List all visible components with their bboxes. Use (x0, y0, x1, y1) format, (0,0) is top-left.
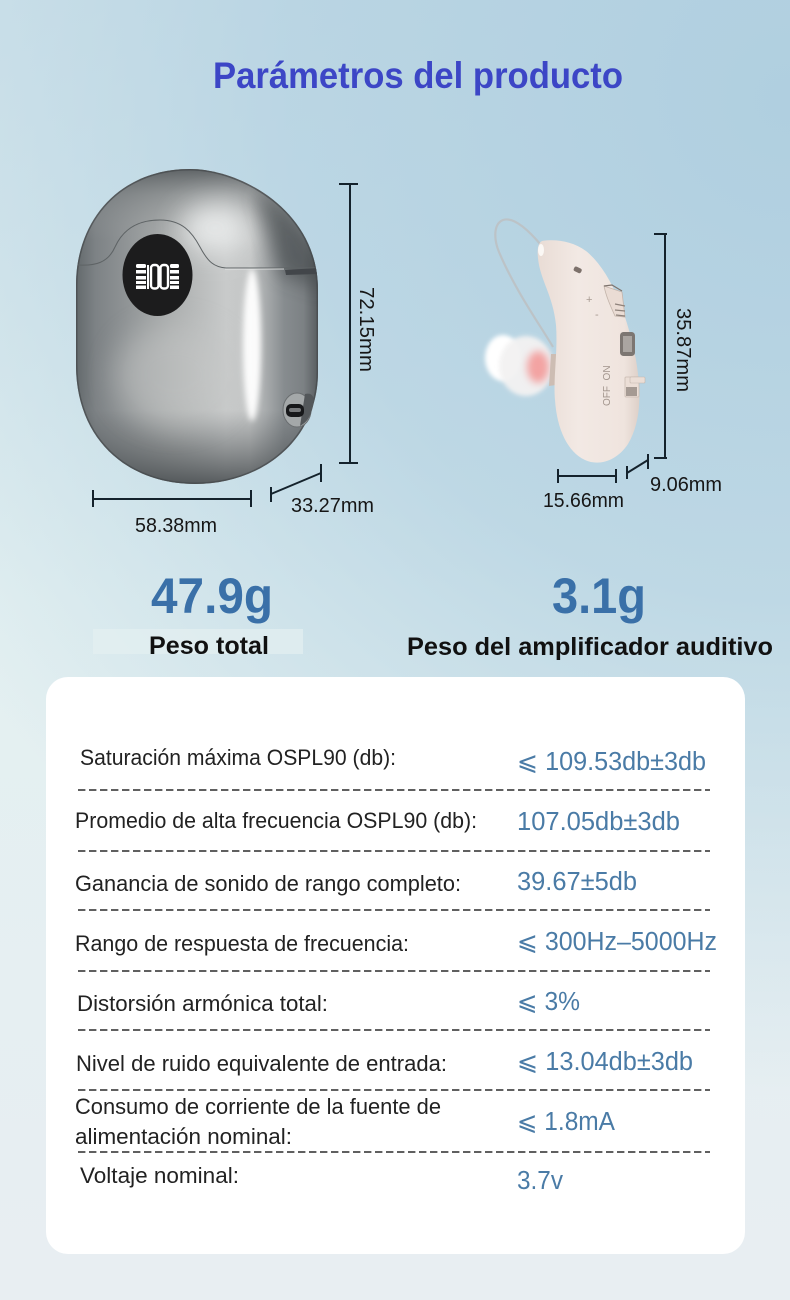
row: saturación: ⩽ 109.53db±3db (517, 748, 706, 776)
product: charging case (70, 165, 325, 488)
weight: amplifier (407, 568, 773, 661)
row: nivel: ⩽ 13.04db±3db (517, 1048, 693, 1076)
row: ganancia: Ganancia de sonido de rango completo: (75, 871, 461, 896)
row: voltaje (80, 1163, 563, 1195)
row: saturación (80, 745, 706, 776)
row: rango (75, 928, 717, 956)
row: ganancia: 39.67±5db (517, 868, 637, 896)
row: nivel: Nivel de ruido equivalente de entrada: (76, 1051, 447, 1076)
dimension: depth 9.06mm (627, 454, 722, 496)
row: voltaje: 3.7v (517, 1167, 563, 1195)
weight: total (93, 568, 303, 660)
power switch (602, 365, 645, 406)
dimension: depth 9.06mm: 9.06mm (650, 474, 722, 496)
row: promedio: Promedio de alta frecuencia OSPL90 (db): (75, 808, 477, 833)
dimension: width 58.38mm (93, 490, 251, 537)
top microphone (573, 266, 582, 274)
row: distorsión (77, 988, 580, 1016)
ear wire (495, 219, 553, 347)
icon: USB-C port (283, 393, 314, 427)
amplifier dimensions (543, 234, 722, 512)
row: rango: Rango de respuesta de frecuencia: (75, 931, 409, 956)
weight: amplifier: Peso del amplificador auditivo (407, 633, 773, 661)
ear dome (485, 335, 556, 396)
title: Parámetros del producto (213, 55, 623, 96)
row: consumo (75, 1094, 615, 1149)
dimension: depth 33.27mm (271, 464, 374, 517)
icon: case display (122, 234, 192, 316)
power switch: OFF ON (602, 365, 613, 406)
dimension: height 72.15mm: 72.15mm (355, 287, 377, 372)
dimension: depth 33.27mm: 33.27mm (291, 495, 374, 517)
row: distorsión: ⩽ 3% (517, 988, 580, 1016)
amplifier body (538, 240, 639, 463)
product: hearing amplifier (485, 219, 645, 463)
row: saturación: Saturación máxima OSPL90 (db): (80, 745, 396, 770)
row: promedio: 107.05db±3db (517, 808, 680, 836)
panel: parameter table (46, 677, 745, 1254)
dimension: width 15.66mm: 15.66mm (543, 490, 624, 512)
dimension: height 35.87mm: 35.87mm (672, 308, 694, 392)
volume rocker: - (595, 309, 599, 321)
row: consumo: ⩽ 1.8mA (517, 1108, 615, 1136)
volume rocker (586, 285, 625, 321)
row: ganancia (75, 868, 637, 896)
amplifier display (620, 332, 635, 356)
row: rango: ⩽ 300Hz–5000Hz (517, 928, 717, 956)
volume rocker: + (586, 294, 592, 306)
dimension: height 72.15mm (339, 184, 377, 463)
weight: amplifier: 3.1g (552, 568, 646, 624)
row: nivel (76, 1048, 693, 1076)
weight: total: 47.9g (151, 568, 273, 624)
row: promedio (75, 808, 680, 836)
case dimensions (93, 184, 377, 537)
row: distorsión: Distorsión armónica total: (77, 991, 328, 1016)
dimension: width 15.66mm (543, 469, 624, 512)
weight: total: Peso total (149, 632, 269, 660)
row: consumo: Consumo de corriente de la fuente de (75, 1094, 441, 1119)
row: voltaje: Voltaje nominal: (80, 1163, 239, 1188)
dimension: height 35.87mm (654, 234, 694, 458)
row: consumo: alimentación nominal: (75, 1124, 292, 1149)
dimension: width 58.38mm: 58.38mm (135, 515, 217, 537)
